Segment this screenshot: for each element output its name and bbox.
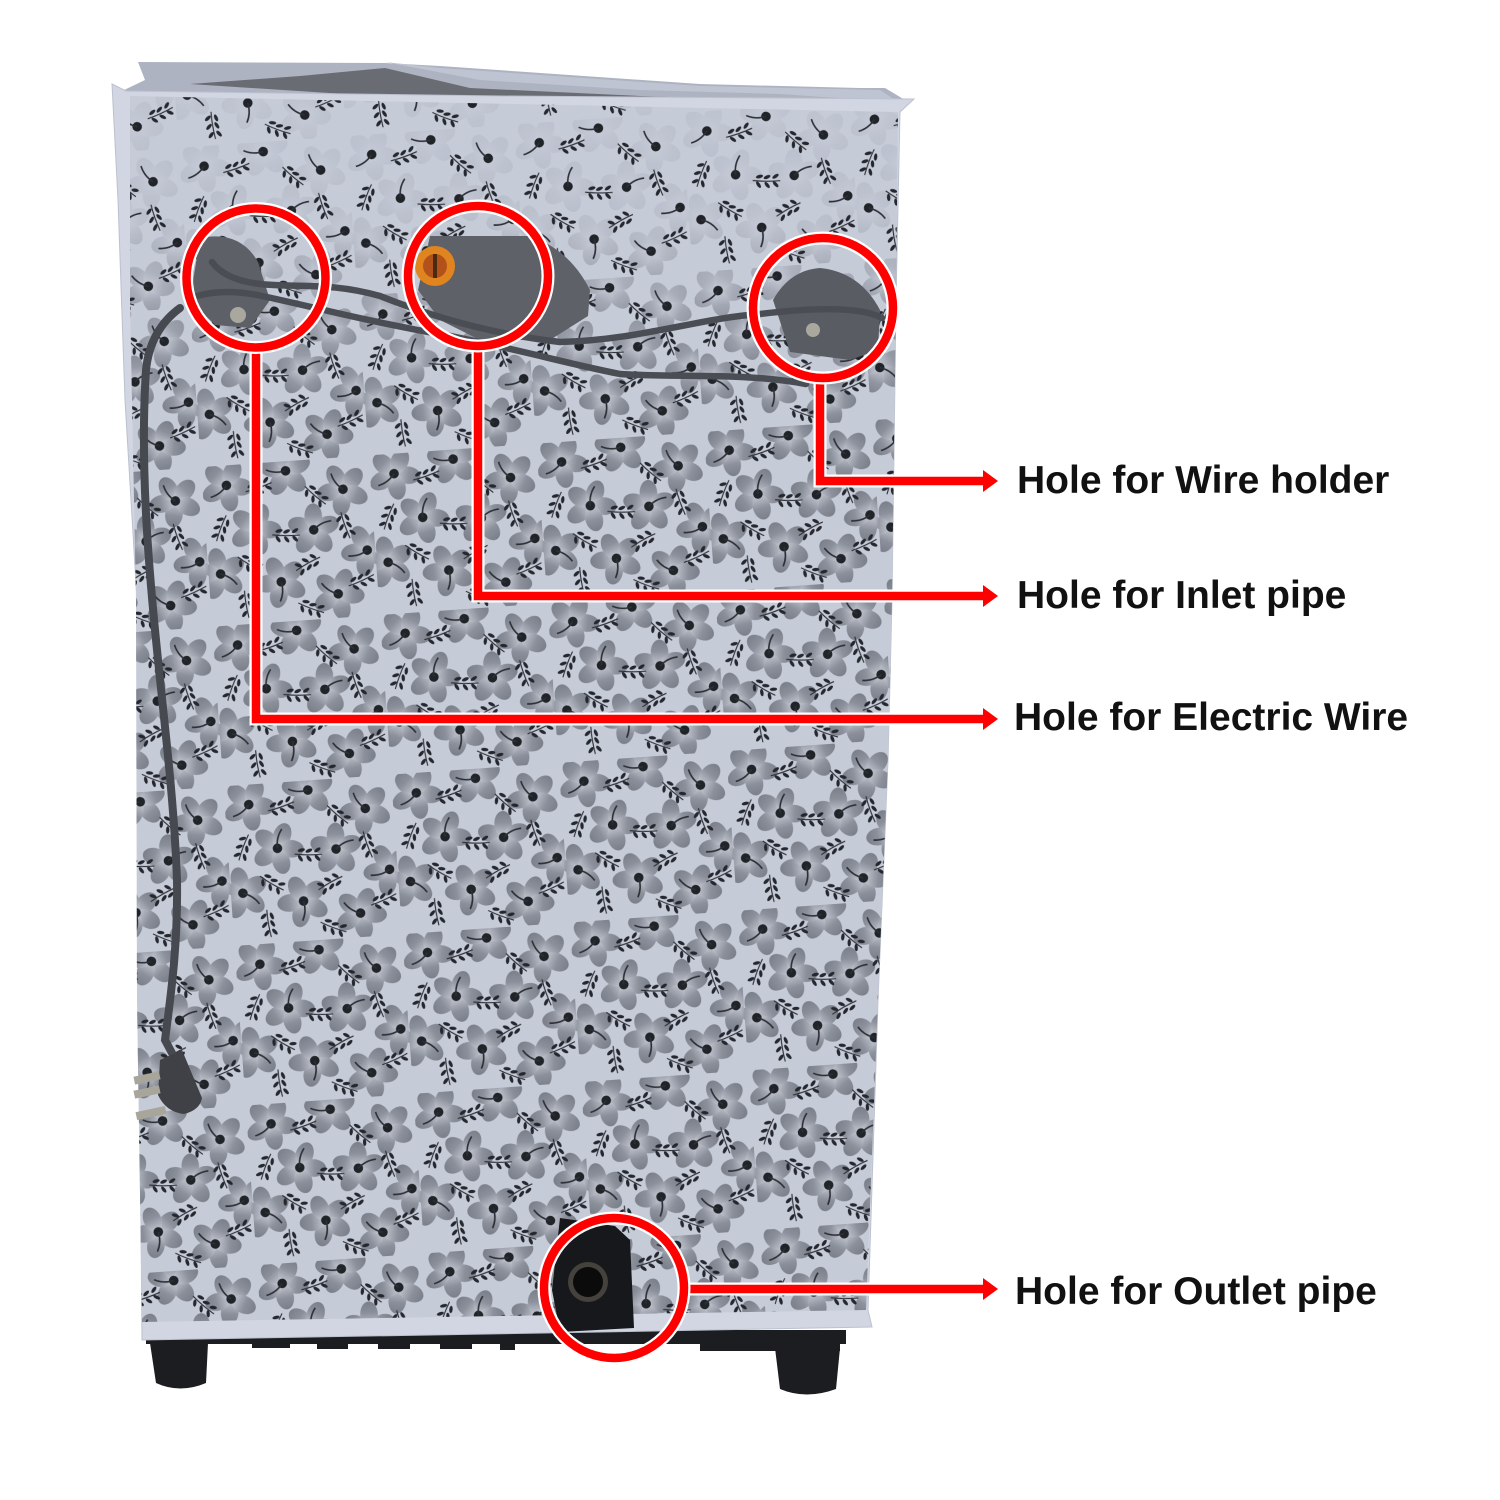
- infographic: washing machine cover with labelled holes: [112, 62, 1407, 1394]
- hole: wire holder: [773, 268, 880, 360]
- callout line: outlet pipe: [686, 1278, 998, 1300]
- cover fabric with floral print: [100, 80, 920, 1350]
- outlet pipe fitting: [568, 1262, 608, 1302]
- label: wire holder: Hole for Wire holder: [1017, 459, 1389, 502]
- screws: [230, 307, 820, 337]
- machine base and legs: [146, 1330, 846, 1394]
- electric cables across the back: [197, 262, 882, 384]
- top flap of the cover: [120, 62, 905, 104]
- callout line: inlet pipe: [478, 348, 998, 607]
- circle marker: outlet pipe hole: [544, 1218, 684, 1358]
- circle marker: wire holder hole: [753, 238, 893, 378]
- label: outlet pipe: Hole for Outlet pipe: [1015, 1270, 1377, 1313]
- callout line: electric wire: [256, 348, 998, 730]
- power plug: [133, 1050, 202, 1120]
- circle marker: electric wire hole: [186, 208, 326, 348]
- hole: electric wire: [190, 236, 270, 328]
- circle marker: inlet pipe hole: [408, 206, 548, 346]
- label: inlet pipe: Hole for Inlet pipe: [1017, 574, 1346, 617]
- inlet connector with orange ring: [415, 246, 455, 286]
- power cord on left side: [144, 308, 180, 1068]
- hole: outlet pipe: [552, 1218, 634, 1332]
- hole openings showing machine back: [190, 236, 880, 1332]
- callout line: wire holder: [820, 378, 998, 492]
- label: electric wire: Hole for Electric Wire: [1014, 696, 1408, 739]
- cover outline binding: [112, 84, 914, 1340]
- hole: inlet pipe: [418, 236, 590, 340]
